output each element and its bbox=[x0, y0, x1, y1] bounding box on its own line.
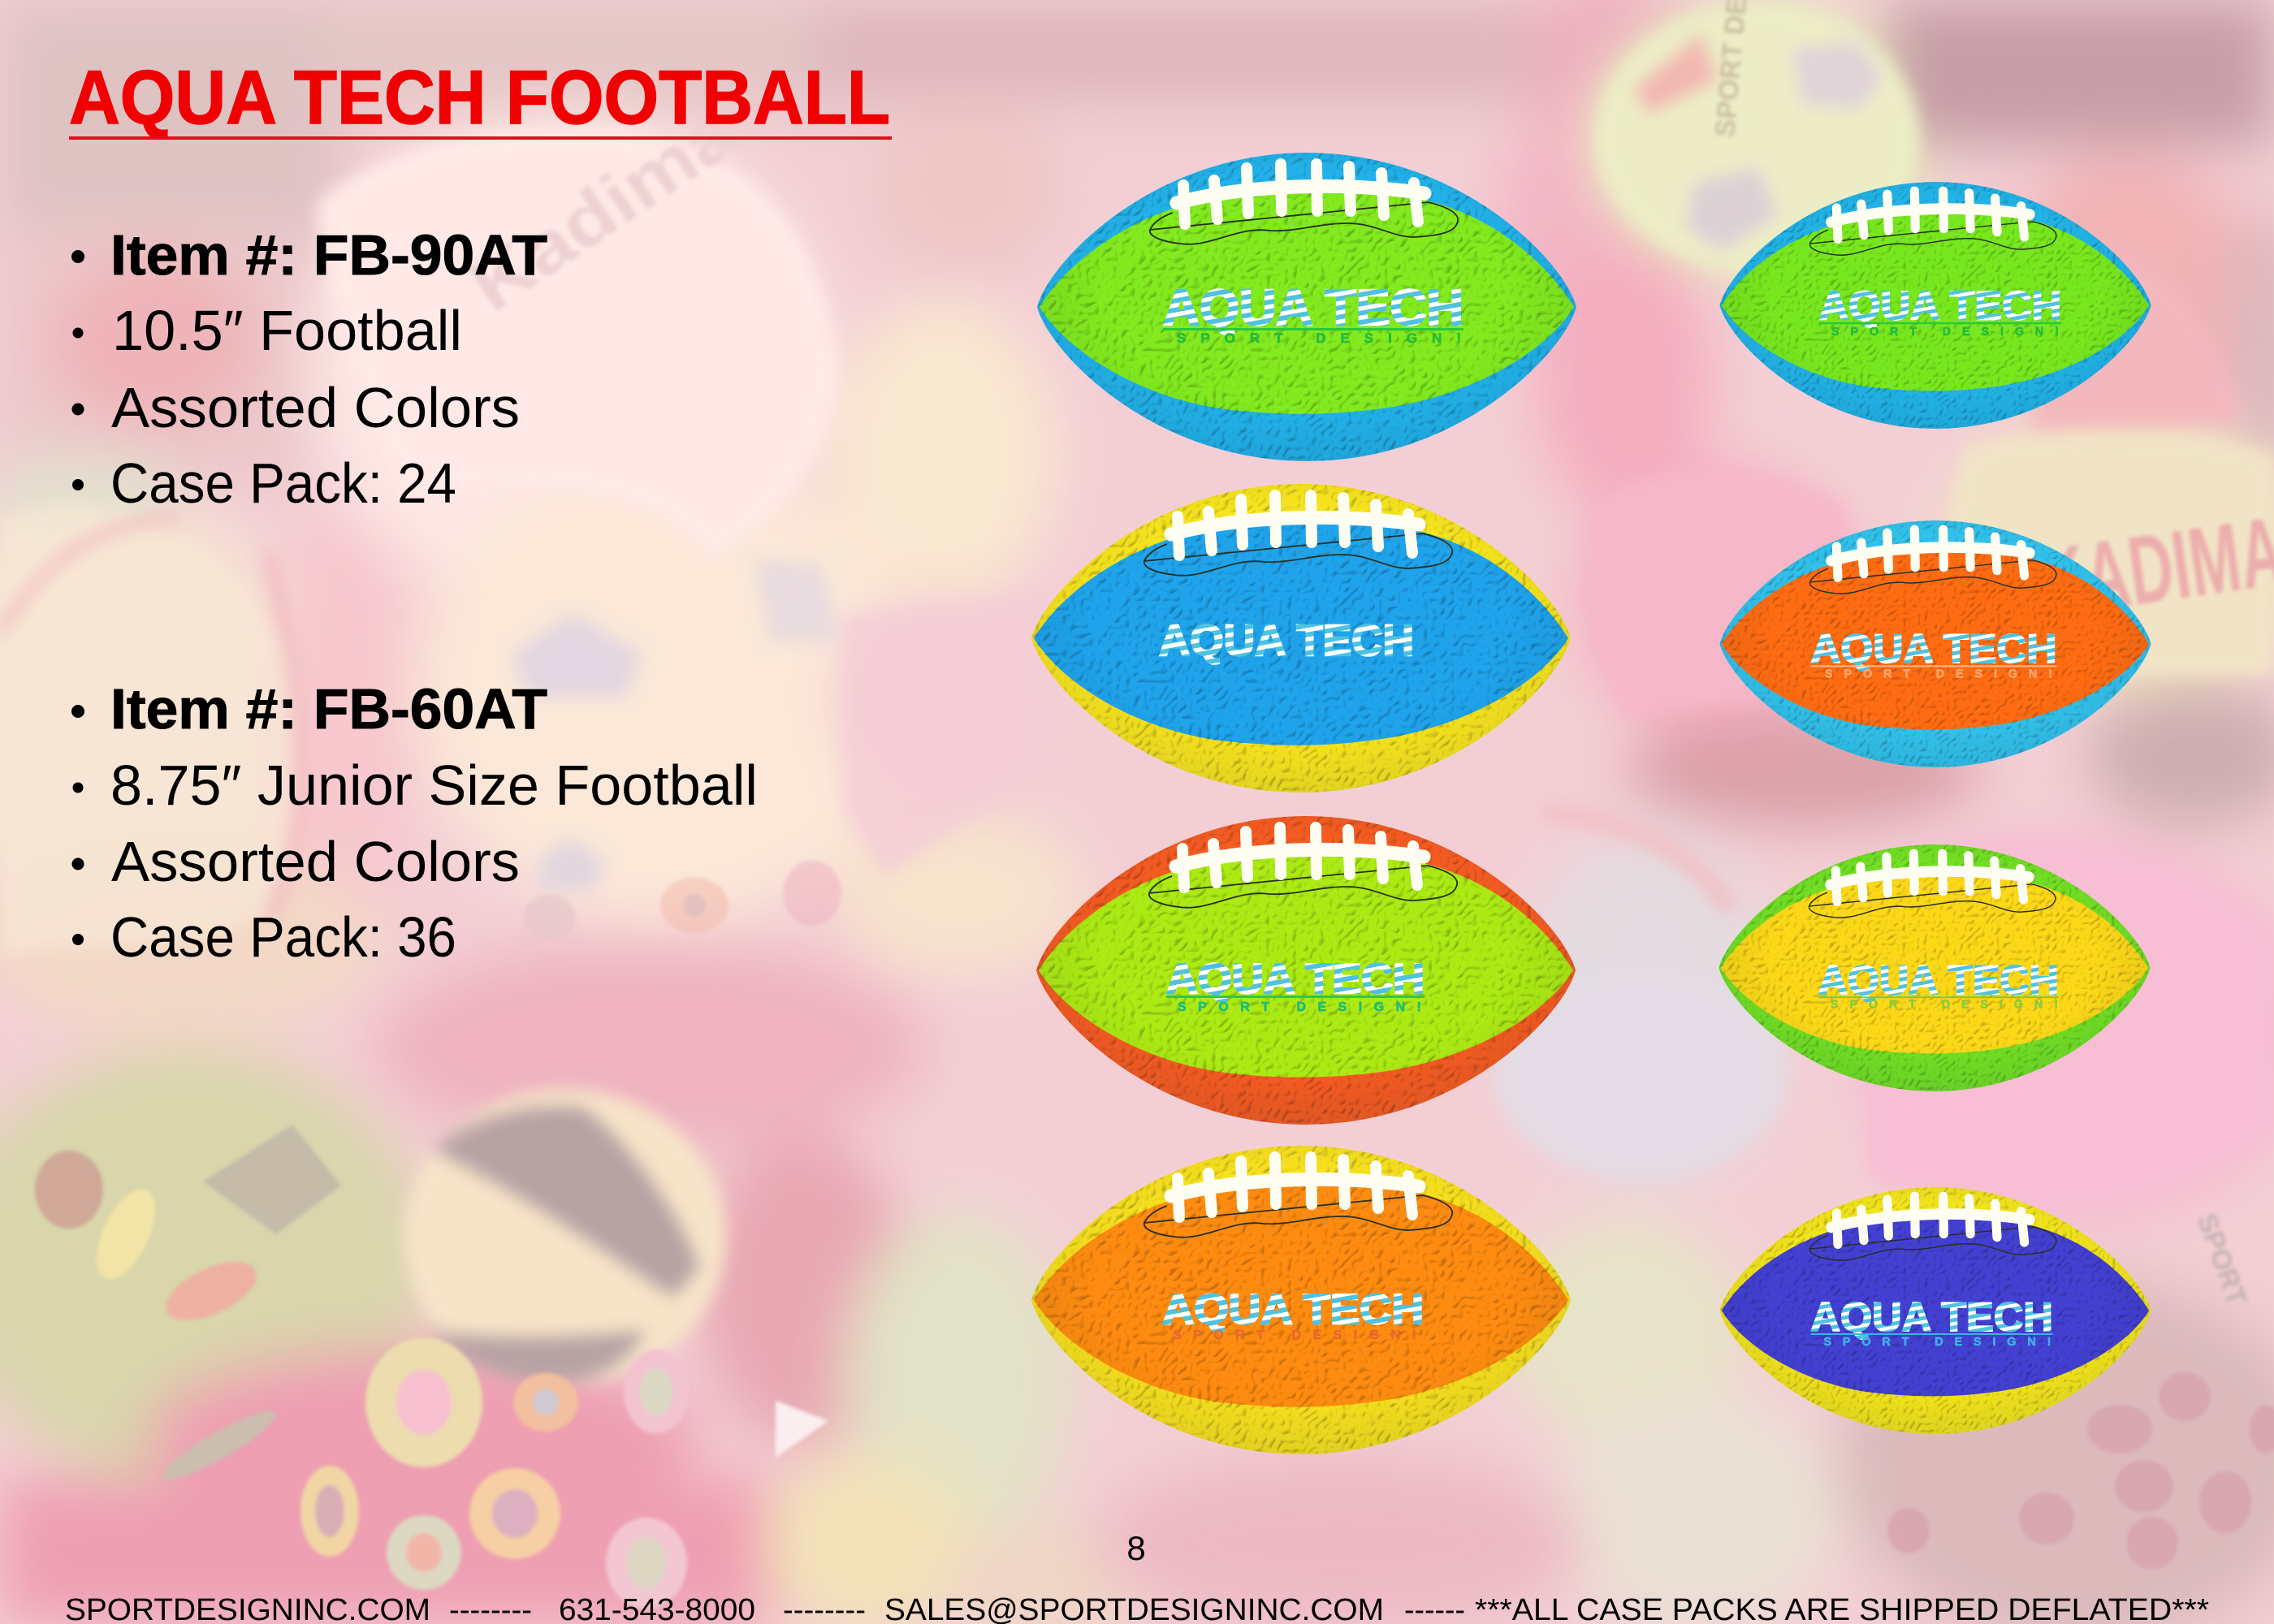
football: small purple and yellow: SPORT DESIGN! bbox=[1823, 1336, 2051, 1349]
size: 10.5″ Football bbox=[112, 299, 462, 362]
football: large lime and red-orange: AQUA TECH bbox=[1166, 956, 1424, 1003]
football: large green and blue: AQUA TECH bbox=[1163, 280, 1463, 336]
football: small purple and yellow: AQUA TECH bbox=[1810, 1294, 2053, 1340]
background: washed-out collage of balls: Kadima bbox=[456, 91, 752, 328]
football: small yellow and green: AQUA TECH bbox=[1818, 957, 2059, 1003]
case pack: Case Pack: 36 bbox=[110, 905, 456, 969]
football: small yellow and green bbox=[1718, 844, 2151, 1091]
football: small green and blue: SPORT DESIGN! bbox=[1831, 326, 2059, 339]
footer contact line bbox=[65, 1593, 2209, 1624]
item number: Item #: FB-90AT bbox=[110, 223, 547, 287]
football: small orange and blue: AQUA TECH bbox=[1810, 626, 2057, 672]
text block: FB-90AT details bbox=[71, 223, 547, 515]
title: AQUA TECH FOOTBALL bbox=[69, 54, 890, 140]
football: small green and blue: AQUA TECH bbox=[1819, 283, 2061, 329]
colors: Assorted Colors bbox=[111, 830, 520, 893]
football: small yellow and green: SPORT DESIGN! bbox=[1831, 999, 2058, 1012]
football: small purple and yellow bbox=[1719, 1187, 2151, 1434]
football: small green and blue bbox=[1719, 182, 2151, 429]
football: large orange and yellow: SPORT DESIGN! bbox=[1173, 1328, 1416, 1342]
football: large blue and yellow: AQUA TECH bbox=[1159, 616, 1414, 665]
football: large green and blue bbox=[1037, 153, 1576, 461]
colors: Assorted Colors bbox=[111, 376, 520, 439]
football: large orange and yellow bbox=[1031, 1146, 1571, 1454]
background: washed-out collage of balls: SPORT bbox=[2190, 1210, 2252, 1310]
football: large lime and red-orange bbox=[1036, 816, 1576, 1125]
page number: 8 bbox=[1126, 1529, 1146, 1567]
football: small orange and blue bbox=[1719, 520, 2151, 767]
case pack: Case Pack: 24 bbox=[110, 451, 456, 515]
text block: FB-60AT details bbox=[71, 677, 758, 969]
football: large lime and red-orange: SPORT DESIGN! bbox=[1178, 1000, 1421, 1014]
football: large orange and yellow: AQUA TECH bbox=[1162, 1286, 1424, 1333]
football: small orange and blue: SPORT DESIGN! bbox=[1825, 668, 2052, 681]
item number: Item #: FB-60AT bbox=[110, 677, 547, 741]
size: 8.75″ Junior Size Football bbox=[110, 754, 758, 817]
football: large blue and yellow bbox=[1031, 484, 1571, 793]
football: large green and blue: SPORT DESIGN! bbox=[1177, 330, 1461, 346]
